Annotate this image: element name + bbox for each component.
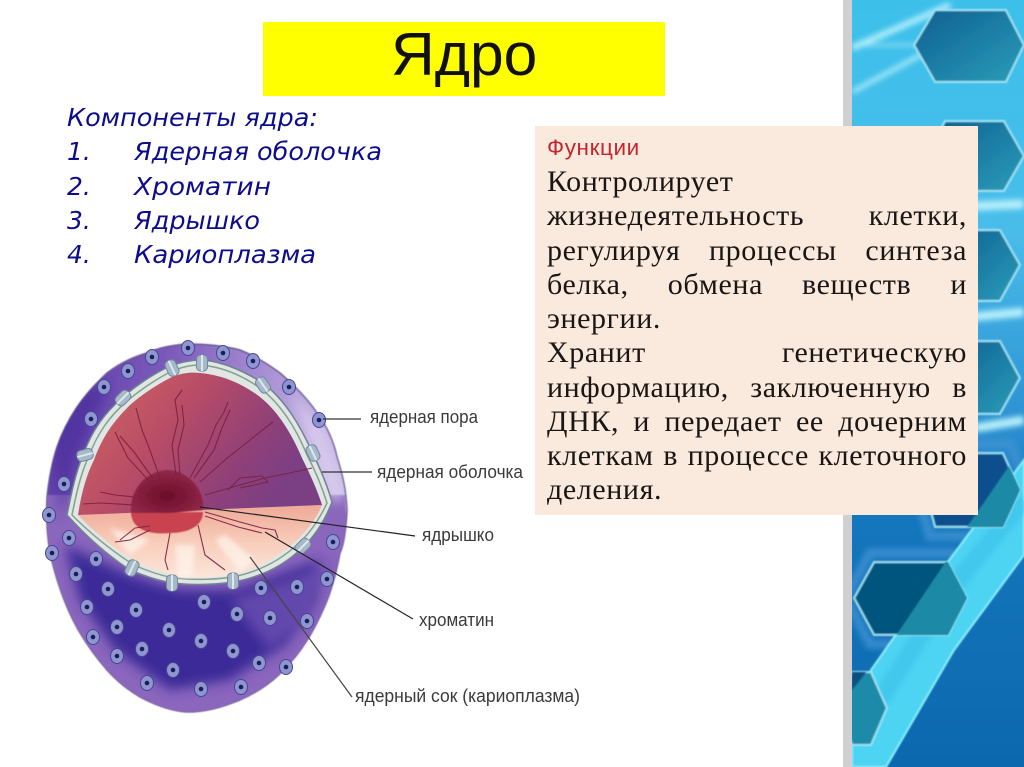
functions heading: Функции	[547, 135, 640, 160]
chromatin strands	[83, 390, 312, 570]
item 4: 4.	[67, 240, 91, 269]
karyoplasm lower half	[78, 505, 322, 578]
functions body text: жизнедеятельность клетки,	[547, 199, 967, 232]
membrane pore complexes	[76, 355, 321, 591]
functions body text: клеткам в процессе клеточного	[547, 439, 967, 472]
diagonal DNA band	[852, 460, 1024, 767]
item 2: Хроматин	[132, 172, 271, 201]
nucleus diagram	[42, 340, 580, 714]
functions body text: энергии.	[547, 302, 661, 335]
functions body text	[546, 165, 967, 506]
item 1: Ядерная оболочка	[133, 137, 382, 166]
outer shell	[40, 344, 350, 720]
teal portions of hexagons	[852, 450, 1024, 690]
item 3	[67, 206, 260, 235]
karyoplasm upper half	[78, 373, 322, 515]
item 3: Ядрышко	[133, 206, 260, 235]
nucleolus	[131, 470, 203, 533]
item 2	[67, 172, 271, 201]
item 1: 1.	[67, 137, 91, 166]
functions body text: информацию, заключенную в	[547, 371, 967, 404]
functions body text: регулируя процессы синтеза	[547, 234, 967, 267]
hexagon halos	[846, 444, 1024, 644]
functions body text: Хранит генетическую	[547, 336, 967, 369]
decorative blue DNA side panel	[843, 0, 1024, 767]
functions body text: деления.	[547, 473, 662, 506]
item 3: 3.	[67, 206, 91, 235]
label: chromatin: хроматин	[419, 610, 494, 630]
hexagons	[840, 10, 1024, 745]
functions body text: Контролирует	[547, 165, 734, 198]
functions body text: ДНК, и передает ее дочерним	[547, 405, 967, 438]
light strands	[852, 5, 1024, 428]
functions panel	[535, 126, 978, 515]
label: nuclear envelope: ядерная оболочка	[377, 462, 524, 482]
functions body text: белка, обмена веществ и	[547, 268, 967, 301]
list heading: Компоненты ядра:	[67, 103, 318, 132]
nuclear envelope	[67, 360, 332, 584]
title text: Ядро	[391, 20, 537, 88]
diagram labels	[355, 407, 580, 706]
components list	[67, 103, 382, 269]
nuclear pores on outer shell	[42, 340, 340, 696]
label: nucleolus: ядрышко	[422, 525, 494, 545]
title banner	[263, 22, 665, 96]
item 2: 2.	[67, 172, 91, 201]
item 4: Кариоплазма	[134, 240, 316, 269]
leader lines	[200, 419, 415, 697]
label: nuclear pore: ядерная пора	[370, 407, 479, 427]
label: karyoplasm: ядерный сок (кариоплазма)	[355, 686, 580, 706]
